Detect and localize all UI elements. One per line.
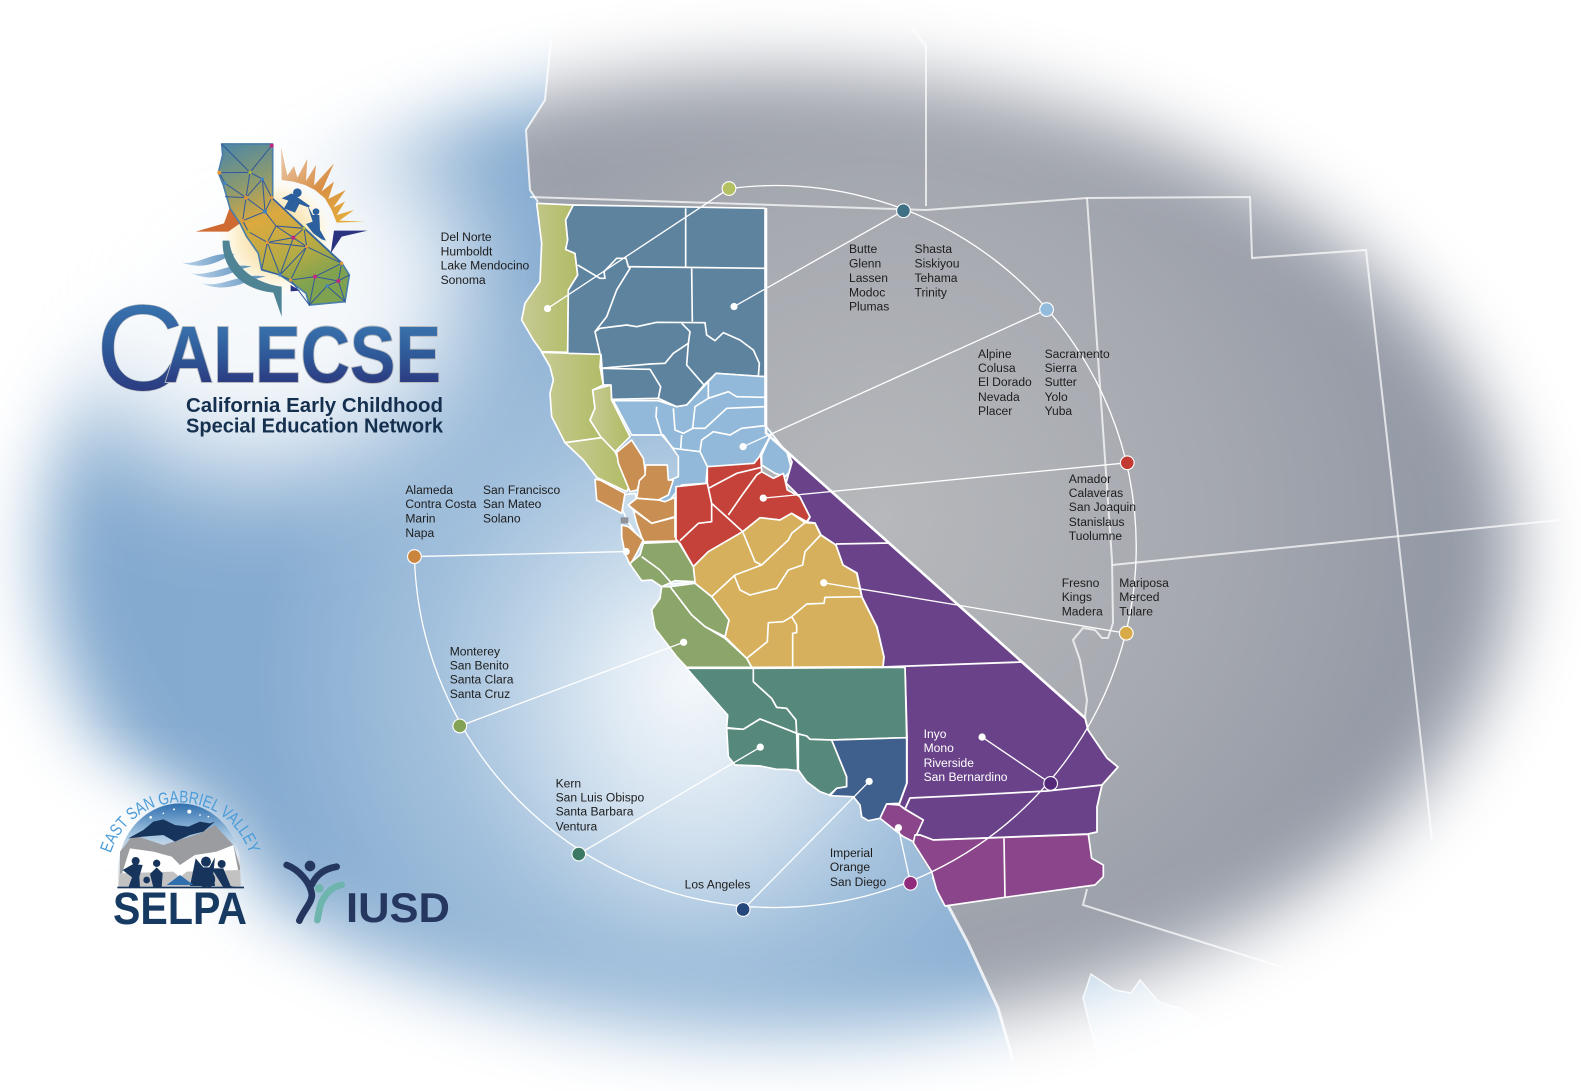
logo emblem: California network with sun and compass: [182, 144, 368, 317]
label: Alpine group: Colusa: [978, 361, 1016, 375]
label: Butte group: Plumas: [849, 300, 889, 314]
label: Monterey group: Santa Cruz: [450, 687, 510, 701]
inner white dots: [544, 303, 986, 831]
label: Butte group: Lassen: [849, 271, 888, 285]
book and mountain dome illustration: [117, 803, 244, 888]
land mass: [527, 44, 1542, 1038]
region: Kern, San Luis Obispo, Santa Barbara, Ventura: [687, 667, 907, 795]
label: Del Norte group: Lake Mendocino: [441, 259, 530, 273]
label: Kern group: Ventura: [556, 819, 597, 833]
leader lines: [414, 189, 1127, 909]
compass points: [196, 205, 240, 232]
region: Del Norte, Humboldt, Lake, Mendocino, Sonoma: [522, 203, 630, 492]
network nodes: [217, 144, 343, 288]
label: Amador group: Calaveras: [1069, 486, 1123, 500]
label: Imperial group: Imperial: [830, 846, 873, 860]
ring marker dots: [408, 182, 1134, 916]
children silhouettes: [282, 188, 326, 241]
label: Sacramento group: Yolo: [1045, 390, 1068, 404]
wordmark: ALECSE: ALECSE: [164, 310, 441, 399]
label: Monterey group: San Benito: [450, 659, 509, 673]
label: Alpine group: El Dorado: [978, 375, 1032, 389]
label: Shasta group: Tehama: [915, 271, 958, 285]
label: Sacramento group: Yuba: [1045, 404, 1072, 418]
label: Inyo group: Inyo: [924, 727, 947, 741]
label: Sacramento group: Sutter: [1045, 375, 1077, 389]
teal arc: [223, 241, 282, 317]
label: Kern group: San Luis Obispo: [556, 791, 644, 805]
label: San Francisco group: Solano: [483, 511, 521, 525]
label: Alameda group: Contra Costa: [405, 497, 477, 511]
East San Gabriel Valley SELPA logo: [100, 790, 260, 934]
label: Shasta group: Shasta: [915, 242, 952, 256]
label: Fresno group: Madera: [1062, 605, 1103, 619]
county labels: [405, 230, 1169, 891]
label: Amador group: San Joaquin: [1069, 500, 1136, 514]
label: Inyo group: San Bernardino: [924, 770, 1008, 784]
label: Butte group: Butte: [849, 242, 877, 256]
label: Butte group: Modoc: [849, 285, 885, 299]
sun glow: [215, 175, 338, 298]
label: Alpine group: Alpine: [978, 347, 1012, 361]
waves: [182, 254, 266, 287]
label: Mariposa group: Mariposa: [1119, 576, 1169, 590]
Nevada and Arizona border highlight: [766, 208, 1085, 718]
logo tagline: California Early Childhood: [186, 395, 443, 417]
label: Butte group: Glenn: [849, 257, 881, 271]
white glow behind SELPA logo: [0, 785, 235, 975]
region: Inyo, Mono, Riverside, San Bernardino: [786, 453, 1118, 840]
label: Alameda group: Alameda: [405, 483, 453, 497]
label: San Francisco group: San Mateo: [483, 497, 542, 511]
label: Amador group: Stanislaus: [1069, 515, 1125, 529]
label: Monterey group: Monterey: [450, 644, 501, 658]
SELPA wordmark: SELPA: [113, 883, 247, 934]
label: Los Angeles: Los Angeles: [685, 877, 750, 891]
label: Alameda group: Napa: [405, 526, 434, 540]
white glow behind CALECSE logo: [40, 95, 470, 475]
label: Fresno group: Fresno: [1062, 576, 1100, 590]
bay water and gray inset: [621, 493, 643, 539]
label: Imperial group: San Diego: [830, 875, 887, 889]
label: Mariposa group: Tulare: [1119, 605, 1153, 619]
label: Alpine group: Nevada: [978, 390, 1020, 404]
label: Monterey group: Santa Clara: [450, 673, 514, 687]
label: Del Norte group: Humboldt: [441, 245, 493, 259]
label: Alpine group: Placer: [978, 404, 1012, 418]
region: Fresno, Kings, Madera, Mariposa, Merced, Tulare: [693, 513, 884, 667]
label: Inyo group: Mono: [924, 741, 954, 755]
label: Sacramento group: Sierra: [1045, 361, 1077, 375]
label: Inyo group: Riverside: [924, 756, 974, 770]
IUSD logo: [287, 861, 450, 931]
region: Imperial, Orange, San Diego: [880, 804, 1103, 906]
label: Shasta group: Trinity: [915, 285, 948, 299]
label: Kern group: Santa Barbara: [556, 805, 634, 819]
label: Fresno group: Kings: [1062, 590, 1092, 604]
label: San Francisco group: San Francisco: [483, 483, 560, 497]
label: Amador group: Amador: [1069, 472, 1111, 486]
IUSD figure icon: [287, 861, 342, 921]
CALECSE logo: [96, 144, 444, 438]
region: Butte, Glenn, Lassen, Modoc, Plumas, Shasta, Siskiyou, Tehama, Trinity: [566, 205, 765, 407]
ring arc: [414, 186, 1136, 908]
region: Los Angeles: [830, 738, 907, 821]
region: Alpine, Colusa, El Dorado, Nevada, Placer, Sacramento, Sierra, Sutter, Yolo, Yuba: [612, 373, 792, 502]
label: Shasta group: Siskiyou: [915, 257, 960, 271]
label: Del Norte group: Del Norte: [441, 230, 492, 244]
map: central counties: [595, 440, 884, 667]
label: Imperial group: Orange: [830, 860, 870, 874]
wordmark: large C: C: [96, 280, 184, 416]
region: Amador, Calaveras, San Joaquin, Stanislaus, Tuolumne: [676, 455, 810, 567]
coastline: [526, 40, 551, 202]
label: Amador group: Tuolumne: [1069, 529, 1122, 543]
label: Sacramento group: Sacramento: [1045, 347, 1110, 361]
California silhouette: [218, 144, 349, 305]
arc lettering: EAST SAN GABRIEL VALLEY: [100, 790, 260, 852]
network lines: [219, 144, 349, 305]
glow near south coast: [570, 580, 830, 900]
label: Alameda group: Marin: [405, 511, 436, 525]
label: Kern group: Kern: [556, 776, 581, 790]
region: Monterey, San Benito, Santa Clara, Santa Cruz: [630, 542, 752, 667]
map: southern counties: [687, 667, 1103, 906]
state borders: [530, 28, 1560, 967]
regional ring and leader lines with markers and labels: [405, 182, 1169, 916]
region: Alameda, Contra Costa, Marin, Napa, San Francisco, San Mateo, Solano: [595, 440, 678, 565]
sun rays: [281, 147, 365, 223]
label: Mariposa group: Merced: [1119, 590, 1159, 604]
IUSD wordmark: IUSD: [346, 884, 450, 931]
CALECSE logo: Special Education Network: [186, 416, 444, 438]
map: northern counties: [522, 203, 792, 502]
Gulf of California water: [1082, 973, 1172, 1034]
label: Del Norte group: Sonoma: [441, 273, 486, 287]
